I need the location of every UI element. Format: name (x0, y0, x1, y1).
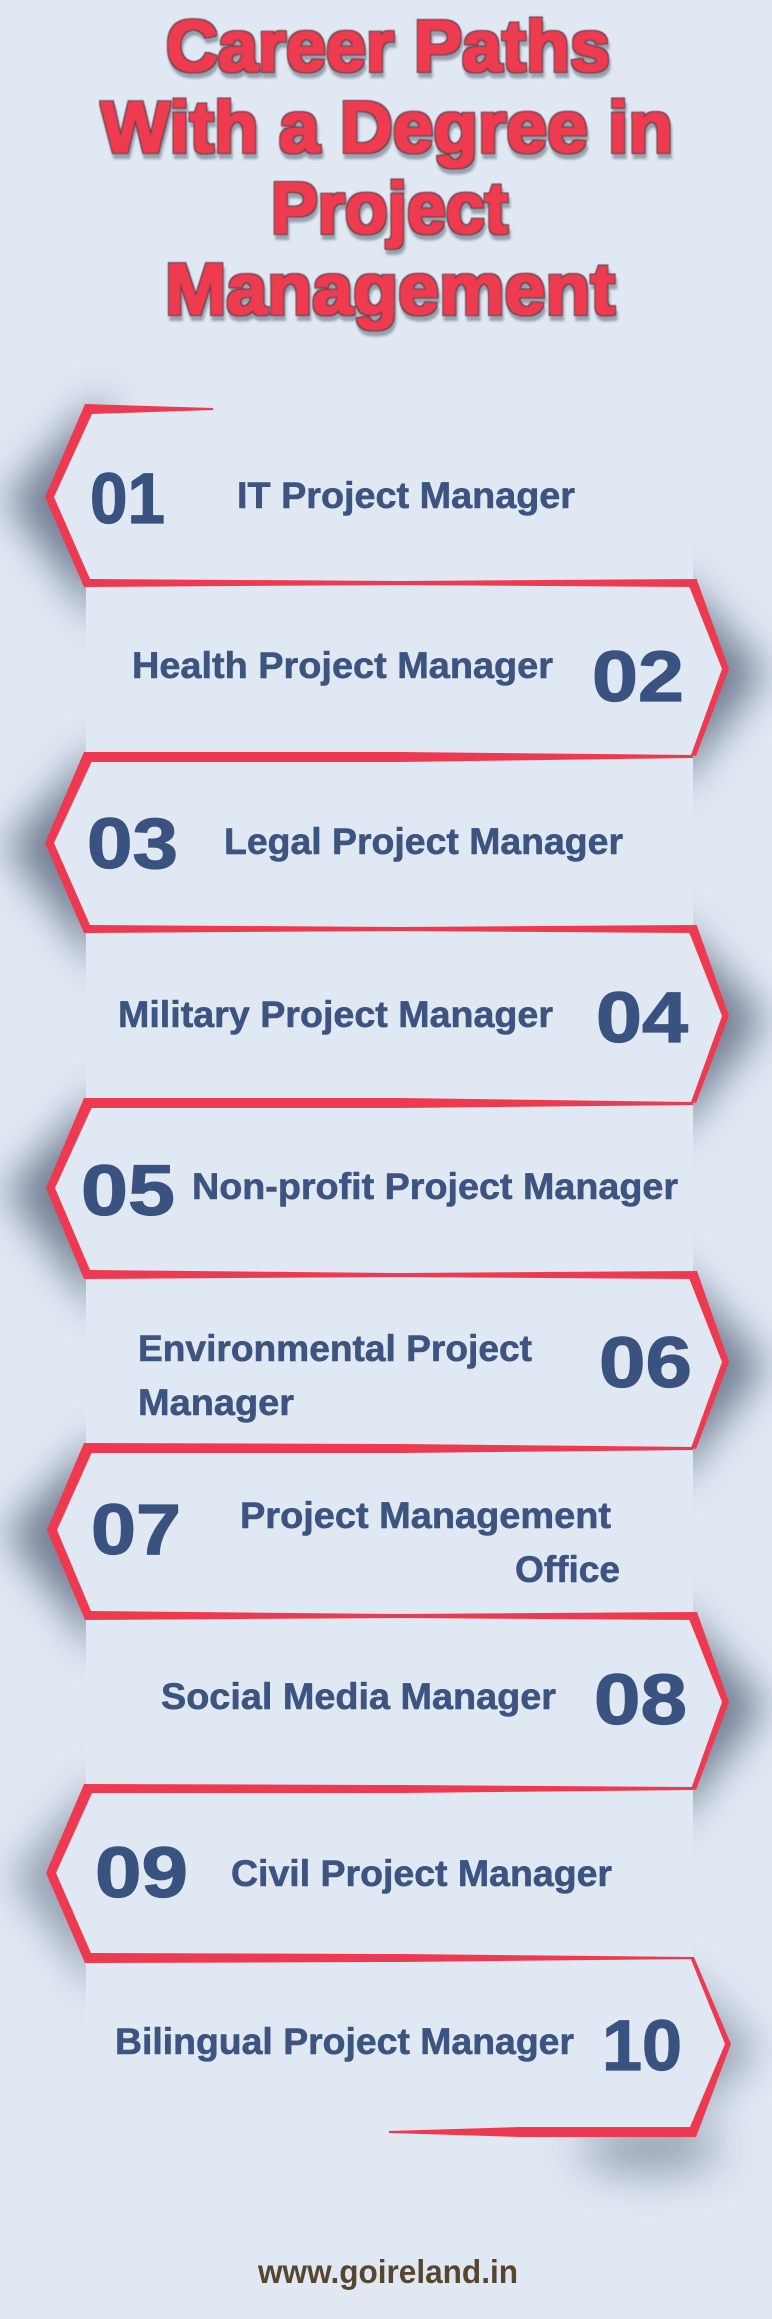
arrow 04: Military Project Manager: 04 (596, 979, 689, 1058)
title: Management (165, 250, 615, 330)
arrow 01: IT Project Manager: IT Project Manager (237, 474, 575, 516)
arrow 03: Legal Project Manager: Legal Project Manager (224, 820, 623, 862)
arrow 06: Environmental Project Manager: Environmental Project (138, 1327, 532, 1369)
arrow 09: Civil Project Manager (46, 1784, 692, 1963)
arrow 04: Military Project Manager (84, 926, 729, 1108)
arrow 10: Bilingual Project Manager: Bilingual Project Manager (115, 2020, 574, 2062)
arrow 02: Health Project Manager: Health Project Manager (132, 644, 553, 686)
arrow 10: Bilingual Project Manager: 10 (602, 2007, 682, 2086)
panel backgrounds (50, 409, 729, 2132)
title: Project (271, 169, 508, 249)
footer website: www.goireland.in (257, 2253, 518, 2290)
arrow 05: Non-profit Project Manager: 05 (81, 1152, 175, 1231)
title: With a Degree in (101, 88, 673, 168)
arrow 05: Non-profit Project Manager: Non-profit Project Manager (192, 1165, 678, 1207)
arrow 04: Military Project Manager: Military Project Manager (118, 993, 553, 1035)
arrow 07: Project Management Office: Office (515, 1548, 620, 1590)
arrow 09: Civil Project Manager: Civil Project Manager (231, 1852, 612, 1894)
arrow 01: IT Project Manager: 01 (90, 460, 165, 539)
arrow 01: IT Project Manager (45, 404, 697, 587)
arrow 10: Bilingual Project Manager (115, 1957, 731, 2137)
arrow 08: Social Media Manager: 08 (594, 1661, 687, 1740)
arrow drop shadows (6, 392, 766, 2166)
arrow 03: Legal Project Manager: 03 (87, 805, 178, 884)
arrow 05: Non-profit Project Manager (46, 1098, 697, 1279)
arrow 06: Environmental Project Manager (84, 1271, 729, 1453)
title: Career Paths (166, 7, 610, 87)
arrow 08: Social Media Manager: Social Media Manager (161, 1675, 556, 1717)
arrow 09: Civil Project Manager: 09 (95, 1834, 188, 1913)
arrow 06: Environmental Project Manager: 06 (599, 1324, 692, 1403)
arrow 03: Legal Project Manager (45, 752, 697, 933)
arrow 07: Project Management Office (47, 1443, 697, 1620)
arrow 02: Health Project Manager (84, 580, 729, 762)
arrow 07: Project Management Office: 07 (91, 1491, 181, 1570)
arrow 06: Environmental Project Manager: Manager (138, 1381, 294, 1423)
title (101, 7, 673, 330)
arrow 02: Health Project Manager: 02 (592, 638, 684, 717)
arrow 08: Social Media Manager (84, 1612, 729, 1793)
arrow 07: Project Management Office: Project Management (240, 1494, 612, 1536)
